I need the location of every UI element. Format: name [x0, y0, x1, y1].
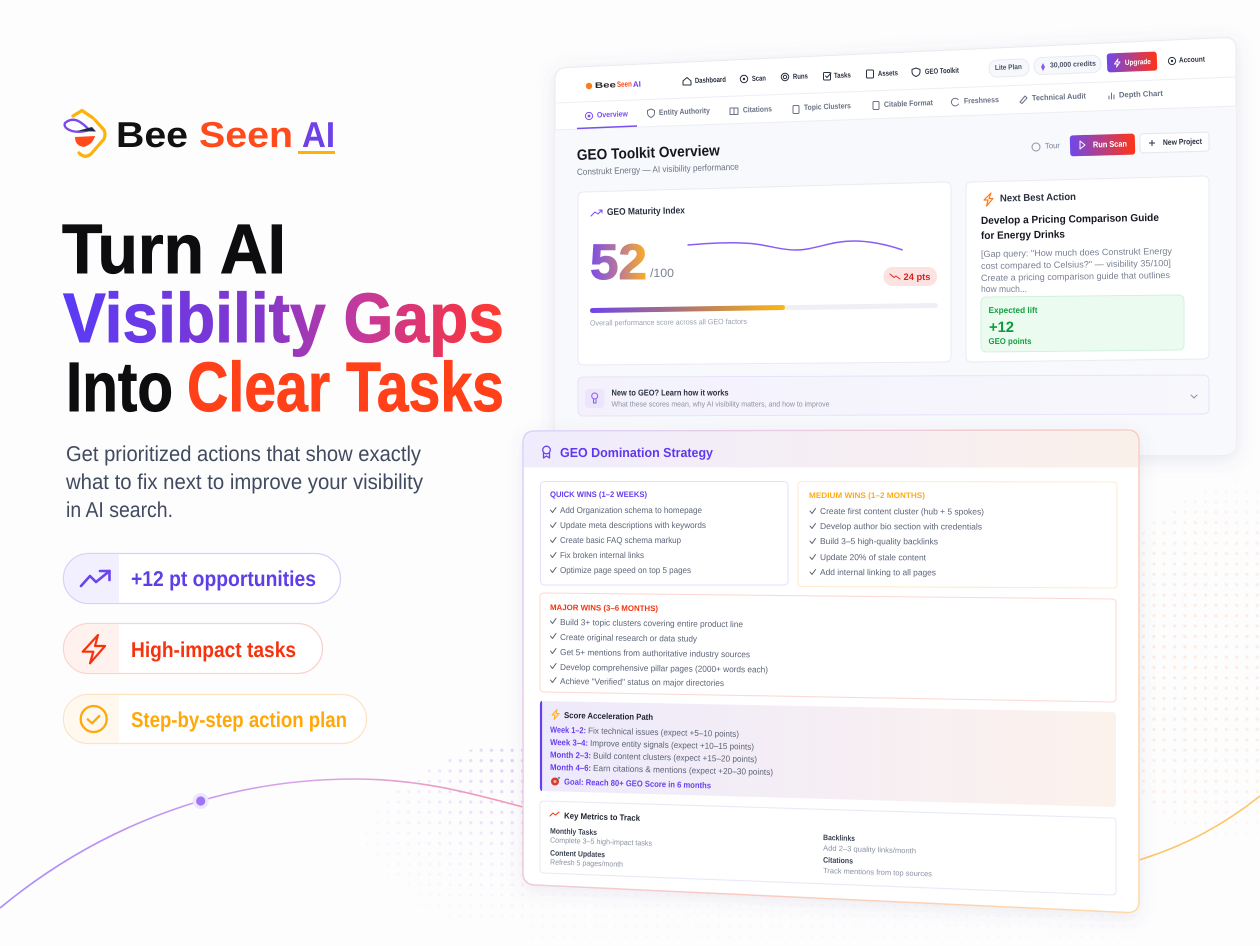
quick wins checklist: Add Organization schema to homepage [560, 505, 702, 515]
metric: Content Updates: Refresh 5 pages/month [550, 858, 623, 869]
tour link: Tour [1045, 141, 1060, 150]
metric: Backlinks [823, 833, 916, 855]
pill: +12 pt opportunities [64, 554, 340, 604]
icon: trend [591, 210, 602, 216]
action heading line 1: Develop a Pricing Comparison Guide [981, 212, 1159, 227]
tab: Citations: Citations [743, 104, 773, 114]
purple accent border [541, 702, 542, 790]
nav: Assets [866, 68, 898, 78]
dot field: lower faint [530, 885, 1140, 940]
action description: [Gap query: "How much does Construkt Energy [981, 246, 1173, 259]
medium wins checklist: Update 20% of stale content [820, 552, 927, 562]
goal text: Goal: Reach 80+ GEO Score in 6 months [564, 777, 711, 790]
metric: Citations: Track mentions from top sources [823, 866, 932, 878]
nav: Tasks [824, 70, 851, 80]
banner title: New to GEO? Learn how it works [612, 388, 729, 398]
paragraph line 2: what to fix next to improve your visibility [65, 470, 423, 494]
sparkline [688, 241, 903, 250]
headline [62, 210, 504, 426]
medium wins heading: MEDIUM WINS (1–2 MONTHS) [809, 491, 925, 500]
icon: lightbulb [585, 389, 604, 408]
credits pill: 30,000 credits [1050, 59, 1096, 69]
page subtitle: Construkt Energy — AI visibility performance [577, 162, 739, 177]
major wins checklist: Get 5+ mentions from authoritative industry sources [560, 647, 750, 659]
expected lift box: +12 [989, 319, 1014, 336]
intro paragraph [65, 442, 423, 522]
panel: GEO Toolkit dashboard [555, 38, 1236, 456]
panel: Medium Wins [798, 482, 1117, 588]
metric: Backlinks: Add 2–3 quality links/month [823, 844, 916, 855]
decorative curve: left [0, 779, 523, 908]
tab: Citable Format: Citable Format [884, 98, 933, 109]
panel: Score Acceleration Path [540, 701, 1116, 807]
upgrade button [1107, 52, 1157, 72]
expected lift box: Expected lift [988, 305, 1038, 315]
medium wins checklist: Develop author bio section with credentials [820, 521, 982, 532]
progress track [590, 303, 938, 313]
panel: Major Wins [540, 593, 1116, 702]
action description: cost compared to Celsius?" — visibility 35/100] [981, 258, 1171, 271]
major wins checklist: Develop comprehensive pillar pages (2000+ words each) [560, 662, 768, 675]
action description [981, 246, 1173, 294]
caption: Overall performance score across all GEO factors [590, 317, 747, 327]
quick wins checklist: Optimize page speed on top 5 pages [560, 565, 691, 575]
nav: Scan [740, 73, 766, 83]
action description: Create a pricing comparison guide that outlines [981, 270, 1171, 283]
nav: Dashboard [683, 75, 726, 85]
change badge: 24 pts [904, 272, 930, 283]
icon: bolt [984, 193, 993, 206]
timeline rows: Month 2–3: [550, 750, 591, 760]
top nav logo [586, 79, 641, 90]
panel: Next Best Action [966, 176, 1209, 362]
logo wordmark: Seen: Seen [199, 114, 293, 155]
expected lift box: GEO points [988, 336, 1032, 346]
account link [1168, 54, 1205, 65]
account link: Account [1179, 54, 1205, 64]
medium wins checklist [810, 506, 984, 577]
panel: Quick Wins [540, 482, 788, 585]
icon: bee logo [65, 110, 105, 156]
top nav logo: Bee [595, 80, 617, 90]
major wins checklist: Achieve "Verified" status on major directories [560, 676, 724, 688]
tab: Depth Chart: Depth Chart [1119, 89, 1163, 99]
metric: Monthly Tasks: Monthly Tasks [550, 827, 598, 837]
logo: Bee Seen AI [65, 110, 335, 156]
nav: Runs: Runs [793, 71, 808, 81]
timeline rows: Week 1–2: [550, 725, 586, 735]
panel: GEO Domination Strategy [523, 430, 1139, 913]
action description: how much... [981, 284, 1027, 294]
top nav logo: AI [633, 80, 641, 89]
paragraph line 1: Get prioritized actions that show exactly [66, 442, 421, 466]
metric: Monthly Tasks: Complete 3–5 high-impact tasks [550, 836, 652, 848]
card title: Next Best Action [1000, 192, 1076, 204]
top navigation [683, 66, 959, 85]
tab: Citations [730, 104, 773, 114]
timeline rows: Improve entity signals (expect +10–15 points) [590, 738, 754, 752]
timeline rows: Month 4–6: [550, 762, 591, 773]
top nav logo: Seen [617, 79, 632, 89]
score value: 52 [590, 234, 647, 290]
tab: Freshness [951, 95, 1000, 106]
plan pill: Lite Plan: Lite Plan [995, 62, 1022, 72]
tab: Overview (active) [577, 109, 637, 128]
metric: Content Updates [550, 849, 623, 869]
icon: lightning bolt [83, 635, 105, 663]
medium wins checklist: Create first content cluster (hub + 5 spokes) [820, 506, 984, 517]
headline line 3: Clear Tasks: Clear Tasks [187, 348, 504, 426]
timeline rows: Fix technical issues (expect +5–10 points) [588, 726, 739, 739]
dot field: left lavender [386, 748, 524, 896]
tab: Topic Clusters: Topic Clusters [804, 101, 852, 112]
pill label: Step-by-step action plan [131, 708, 347, 732]
medium wins checklist: Add internal linking to all pages [820, 567, 936, 577]
upgrade button: Upgrade [1125, 57, 1151, 67]
decorative curve: right [1139, 796, 1260, 860]
metric: Content Updates: Content Updates [550, 849, 606, 859]
strategy header band [524, 431, 1138, 468]
help banner: New to GEO [578, 375, 1209, 416]
new project button [1140, 132, 1209, 153]
icon: trend [550, 812, 559, 816]
nav: GEO Toolkit [912, 66, 959, 76]
score denominator: /100 [650, 266, 674, 280]
timeline rows [550, 725, 773, 777]
medium wins checklist: Build 3–5 high-quality backlinks [820, 536, 938, 546]
banner subtitle: What these scores mean, why AI visibility matters, and how to improve [612, 400, 830, 408]
metric: Monthly Tasks [550, 827, 652, 848]
plan pill: Lite Plan [989, 59, 1029, 77]
headline line 1: Turn AI [62, 210, 286, 288]
headline line 2: Visibility Gaps [63, 279, 504, 357]
major wins checklist [550, 617, 768, 688]
panel: GEO Maturity Index [578, 182, 951, 365]
tab: Overview (active): Overview [597, 109, 629, 119]
action heading line 2: for Energy Drinks [981, 229, 1065, 242]
icon: goal target [551, 777, 560, 786]
change badge [884, 267, 937, 286]
nav: Scan: Scan [752, 73, 766, 83]
metrics title: Key Metrics to Track [564, 811, 640, 823]
score path title: Score Acceleration Path [564, 710, 653, 722]
major wins heading: MAJOR WINS (3–6 MONTHS) [550, 603, 658, 613]
page title: GEO Toolkit Overview [577, 142, 720, 164]
pill label: High-impact tasks [131, 638, 296, 662]
strategy title: GEO Domination Strategy [560, 445, 714, 460]
paragraph line 3: in AI search. [66, 498, 173, 522]
icon: bolt [552, 710, 559, 720]
metric: Citations [823, 856, 932, 878]
icon: chevron [1191, 395, 1197, 398]
quick wins checklist: Create basic FAQ schema markup [560, 535, 681, 545]
expected lift box [981, 295, 1184, 352]
run scan button: Run Scan [1093, 139, 1127, 149]
quick wins checklist: Update meta descriptions with keywords [560, 520, 706, 530]
tab: Entity Authority: Entity Authority [659, 106, 711, 117]
logo wordmark: Bee: Bee [116, 114, 188, 155]
icon: check circle [81, 706, 107, 732]
metric: Citations: Citations [823, 856, 854, 865]
run scan button [1070, 134, 1135, 156]
icon: trending up [81, 571, 110, 586]
tab navigation [577, 89, 1163, 128]
nav: Dashboard: Dashboard [695, 75, 726, 85]
quick wins checklist: Fix broken internal links [560, 550, 644, 560]
tab: Freshness: Freshness [964, 95, 1000, 105]
metric: Backlinks: Backlinks [823, 833, 856, 843]
tab: Technical Audit: Technical Audit [1032, 91, 1086, 102]
logo wordmark: AI: AI [302, 114, 335, 155]
quick wins checklist [550, 505, 706, 575]
timeline rows: Week 3–4: [550, 737, 588, 748]
progress fill [590, 305, 785, 313]
nav: Runs [781, 71, 808, 81]
nav: GEO Toolkit: GEO Toolkit [925, 66, 959, 76]
dot field: right peach [1142, 490, 1259, 834]
pill: high-impact tasks [64, 624, 322, 674]
panel: Key Metrics to Track [540, 801, 1116, 895]
major wins checklist: Build 3+ topic clusters covering entire product line [560, 617, 743, 629]
headline line 3: Into: Into [66, 348, 173, 426]
credits pill [1034, 55, 1101, 75]
pill: step-by-step action plan [64, 694, 366, 744]
nav: Assets: Assets [878, 68, 898, 78]
nav: Tasks: Tasks [834, 70, 851, 80]
tab: Topic Clusters [793, 101, 852, 114]
timeline rows: Build content clusters (expect +15–20 points) [593, 751, 757, 764]
tour link [1032, 141, 1060, 151]
major wins checklist: Create original research or data study [560, 632, 698, 644]
icon: award ribbon [543, 446, 550, 458]
new project button: New Project [1163, 137, 1202, 147]
timeline rows: Earn citations & mentions (expect +20–30 points) [593, 763, 773, 777]
quick wins heading: QUICK WINS (1–2 WEEKS) [550, 490, 647, 499]
logo underline [298, 151, 335, 154]
card title: GEO Maturity Index [607, 205, 686, 218]
pill label: +12 pt opportunities [131, 567, 316, 591]
